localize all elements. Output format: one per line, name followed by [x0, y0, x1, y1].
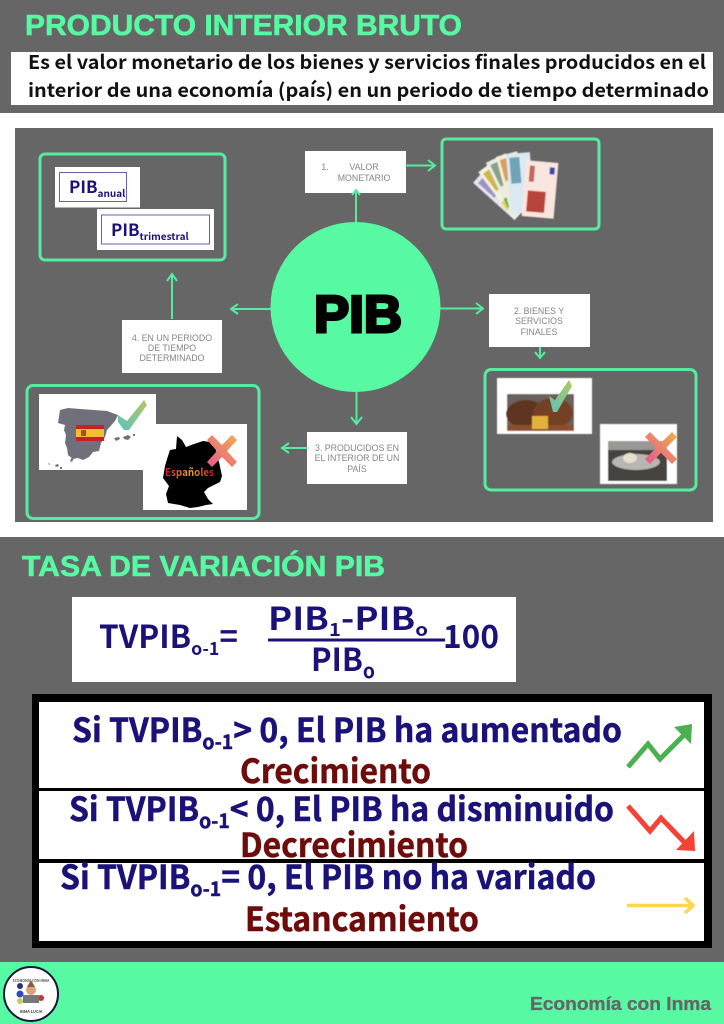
label box 2: FINALES — [521, 327, 557, 337]
definition text block: interior de una economía (país) en un periodo de tiempo determinado — [28, 76, 709, 103]
row: growth — [39, 702, 704, 793]
logo badge: ECONOMÍA CON INMA — [13, 978, 50, 984]
arrow: box 3 to countries — [282, 443, 307, 453]
label box 4: DETERMINADO — [139, 353, 205, 363]
PIB trimestral card — [97, 209, 214, 250]
arrow: box 1 to banknotes — [406, 160, 435, 171]
row: decline — [39, 783, 704, 867]
row: growth: > 0, El PIB ha aumentado — [233, 704, 622, 752]
panel: rate of change section — [0, 537, 724, 962]
title: PRODUCTO INTERIOR BRUTO — [25, 10, 462, 42]
image: flour dough, invalid — [600, 424, 677, 484]
row: stagnation: = 0, El PIB no ha variado — [221, 851, 596, 899]
image: map of Germany, invalid — [143, 424, 247, 510]
frame: countries — [27, 386, 259, 518]
PIB anual card: anual — [98, 185, 125, 200]
icon: check — [118, 400, 147, 430]
image: map of Spain, valid — [39, 394, 156, 470]
formula box: = — [219, 612, 238, 658]
panel: PIB concept diagram — [15, 128, 713, 522]
label box 4 — [122, 320, 222, 373]
arrow: box 4 to periods — [167, 274, 177, 319]
row: growth: Crecimiento — [240, 745, 431, 793]
arrow: box 2 to goods — [535, 347, 545, 358]
label box 1: MONETARIO — [338, 173, 390, 183]
interpretation table — [32, 694, 712, 948]
row: growth: o-1 — [202, 726, 233, 755]
row: decline: o-1 — [199, 805, 230, 834]
row: stagnation: Si TVPIB — [60, 851, 195, 899]
icon: red falling arrow — [628, 806, 695, 851]
label box 4: 4. EN UN PERIODO — [132, 333, 212, 343]
logo badge: INMA LUCIA — [20, 1009, 43, 1015]
formula box: o-1 — [191, 635, 219, 661]
formula box: PIB — [268, 594, 322, 640]
label box 1: 1. — [321, 162, 329, 172]
formula box: o — [363, 655, 375, 684]
label box 1 — [305, 151, 406, 193]
row: stagnation: Estancamiento — [245, 893, 479, 941]
row: stagnation — [39, 851, 704, 941]
PIB trimestral card: trimestral — [140, 228, 189, 243]
image: bread, valid — [497, 378, 592, 434]
PIB anual card: PIB — [69, 173, 98, 198]
image: map of Germany, invalid: Españoles — [165, 465, 214, 480]
section heading: TASA DE VARIACIÓN PIB — [22, 549, 385, 583]
row: decline: < 0, El PIB ha disminuido — [230, 783, 614, 831]
row: decline: Si TVPIB — [69, 783, 204, 831]
icon: yellow flat arrow — [627, 898, 694, 913]
central circle PIB: PIB — [314, 286, 402, 344]
row: decline: Decrecimiento — [240, 819, 468, 867]
label box 3: 3. PRODUCIDOS EN — [315, 443, 399, 453]
icon: cross — [645, 432, 677, 464]
formula box — [72, 594, 516, 684]
central circle PIB — [270, 222, 440, 392]
label box 4: DE TIEMPO — [148, 343, 196, 353]
icon: Spanish flag — [76, 425, 104, 441]
arrow: circle to box 1 — [352, 190, 360, 222]
icon: check — [549, 380, 572, 412]
row: stagnation: o-1 — [190, 873, 221, 902]
label box 2: SERVICIOS — [515, 316, 563, 326]
frame: banknotes — [442, 139, 599, 229]
PIB trimestral card: PIB — [111, 216, 140, 241]
label box 3 — [307, 432, 407, 484]
label box 2 — [489, 294, 590, 347]
label box 1: VALOR — [349, 162, 379, 172]
formula box: 1 — [329, 616, 341, 642]
label box 3: EL INTERIOR DE UN — [315, 453, 399, 463]
logo badge — [4, 967, 58, 1021]
icon: euro banknotes fan — [473, 151, 558, 220]
label box 2: 2. BIENES Y — [514, 306, 564, 316]
formula box: 100 — [443, 612, 499, 658]
formula box: PIB — [311, 635, 365, 681]
formula box: TVPIB — [99, 612, 193, 658]
arrow: circle to box 2 — [440, 303, 483, 314]
arrow: circle to box 4 — [231, 304, 271, 314]
icon: green rising arrow — [628, 724, 692, 767]
author credit: Economía con Inma — [530, 994, 712, 1014]
arrow: circle to box 3 — [351, 392, 362, 424]
footer band — [0, 962, 724, 1024]
formula box: -PIB — [341, 594, 415, 640]
definition text block: Es el valor monetario de los bienes y servicios finales producidos en el — [28, 48, 706, 75]
frame: final goods — [485, 370, 696, 490]
icon: cross — [207, 435, 237, 467]
PIB anual card — [55, 167, 140, 208]
frame: PIB periods — [40, 154, 225, 260]
label box 3: PAÍS — [347, 464, 367, 474]
header band — [0, 0, 724, 113]
definition text block — [11, 48, 713, 105]
formula box: o — [415, 616, 428, 642]
row: growth: Si TVPIB — [72, 704, 207, 752]
